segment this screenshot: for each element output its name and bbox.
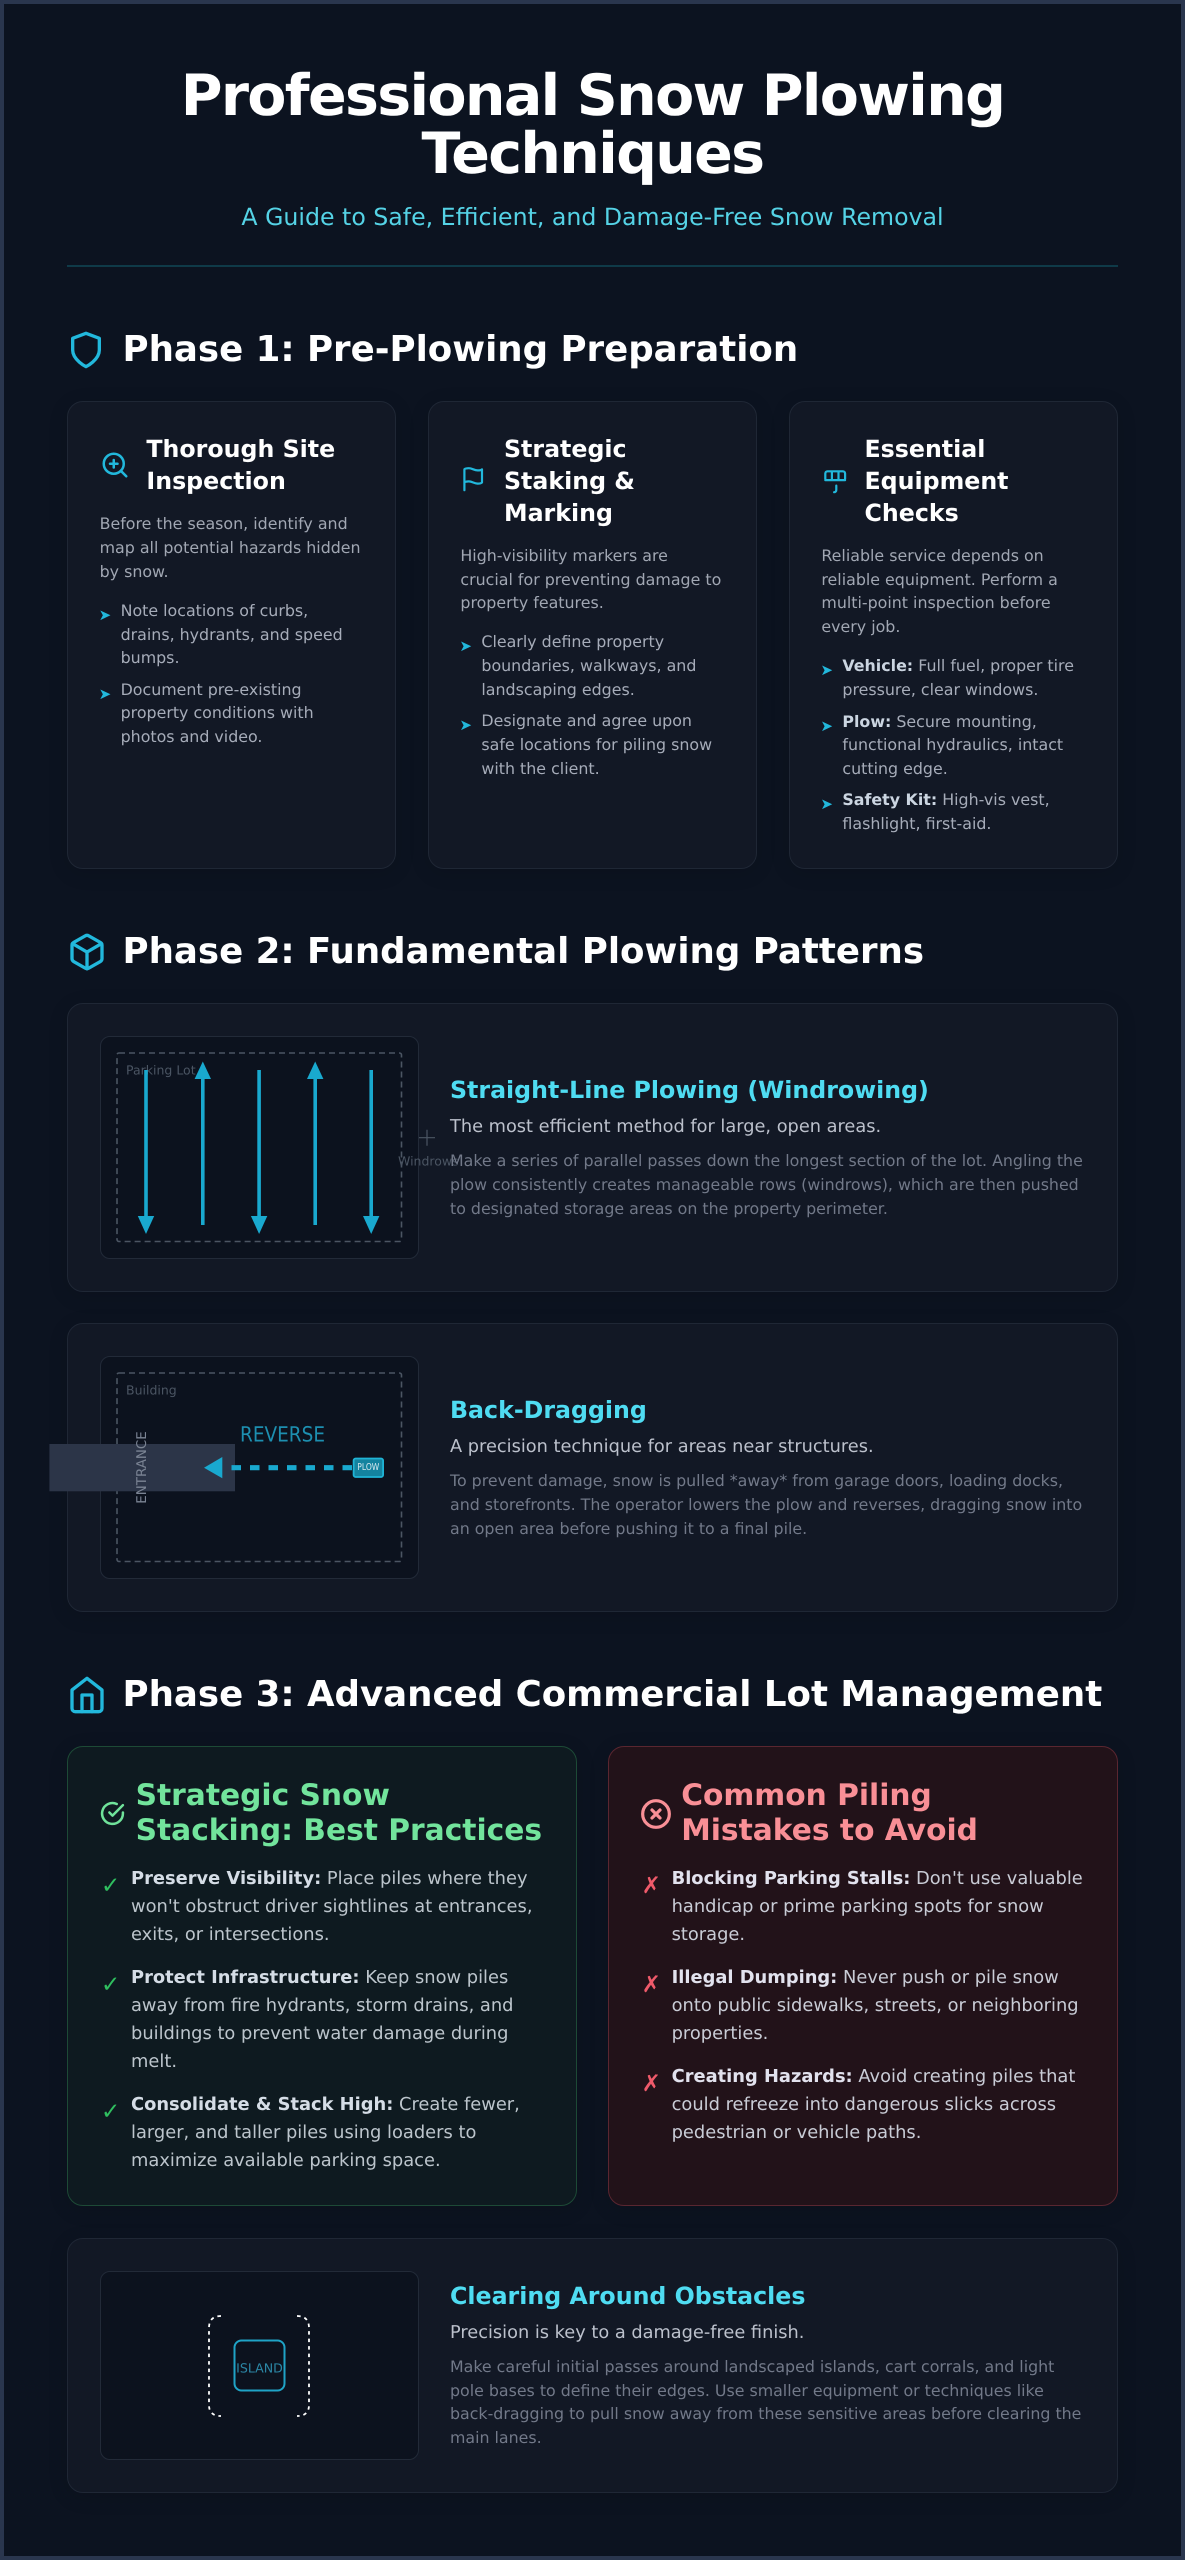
card intro: multi-point inspection before (821, 593, 1051, 612)
technique detail: Make careful initial passes around landscaped islands, cart corrals, and light (450, 2357, 1054, 2376)
entrance label: ENTRANCE (135, 1431, 150, 1504)
card heading: Staking & (504, 467, 635, 495)
arrow: pass 3 down (251, 1070, 267, 1234)
card intro: map all potential hazards hidden (100, 538, 361, 557)
card intro (821, 546, 1058, 636)
card intro: every job. (821, 617, 900, 636)
card heading: Essential (864, 435, 985, 463)
panel: thorough site inspection (67, 401, 396, 869)
panel heading (681, 1778, 978, 1848)
mistake: hazards: could refreeze into dangerous slicks across (672, 2094, 1056, 2115)
icon: box (70, 934, 104, 970)
card heading (864, 435, 1009, 527)
card intro: reliable equipment. Perform a (821, 570, 1058, 589)
panel: straight-line plowing (67, 1003, 1118, 1292)
practice: visibility (101, 1868, 533, 1944)
technique summary: Precision is key to a damage-free finish. (450, 2323, 804, 2343)
icon: shield (71, 332, 101, 368)
title: Techniques (422, 120, 763, 186)
panel: thorough site inspection: ➤ (99, 685, 111, 703)
plow block: PLOW (357, 1462, 380, 1473)
arrow: reverse path (204, 1457, 353, 1478)
panel: thorough site inspection: ➤ (99, 606, 111, 624)
diagram: windrowing (100, 1036, 419, 1259)
practice: infrastructure: Protect Infrastructure: Keep snow piles (131, 1967, 508, 1988)
windrows label: Windrows (398, 1154, 459, 1168)
card heading: Thorough Site (146, 435, 335, 463)
bullet: safety kit: Safety Kit: High-vis vest, (842, 790, 1050, 809)
mistake: dumping: Illegal Dumping: Never push or pile snow (672, 1967, 1059, 1988)
dashed plow path (209, 2316, 309, 2416)
bullet: vehicle (820, 656, 1074, 699)
bullet: vehicle: pressure, clear windows. (842, 680, 1038, 699)
bullet: document (99, 680, 314, 746)
bullet: vehicle: Vehicle: Full fuel, proper tire (842, 656, 1074, 675)
card heading (504, 435, 635, 527)
panel: best practices (67, 1746, 577, 2206)
arrow: pass 4 up (307, 1062, 323, 1225)
panel: mistakes to avoid: ✗ (642, 1972, 661, 1998)
mistake: dumping: properties. (672, 2023, 768, 2044)
diagram: windrowing: Parking Lot (126, 1062, 196, 1078)
technique detail: and storefronts. The operator lowers the plow and reverses, dragging snow into (450, 1495, 1082, 1514)
practice: consolidate: maximize available parking space. (131, 2150, 441, 2170)
mistake: stalls: Blocking Parking Stalls: Don't use valuable (672, 1868, 1083, 1889)
heading: phase 2: Phase 2: Fundamental Plowing Patterns (122, 931, 924, 972)
mistake: dumping: onto public sidewalks, streets, or neighboring (672, 1995, 1079, 2016)
mistake: hazards (642, 2066, 1075, 2142)
panel: mistakes to avoid: ✗ (642, 2071, 661, 2097)
icon: home (70, 1676, 104, 1714)
arrow: pass 5 down (363, 1070, 379, 1234)
panel heading: Common Piling (681, 1778, 932, 1813)
panel: strategic staking (428, 401, 757, 869)
panel: mistakes to avoid (608, 1746, 1118, 2206)
panel heading (136, 1778, 542, 1848)
panel heading: Mistakes to Avoid (681, 1813, 978, 1848)
mistake: dumping (642, 1967, 1079, 2044)
practice: consolidate: Consolidate & Stack High: Create fewer, (131, 2094, 520, 2115)
island (234, 2340, 284, 2390)
bullet: piling locations (459, 711, 712, 778)
icon: check circle (100, 1802, 124, 1826)
card heading: Inspection (146, 467, 286, 495)
technique heading: Back-Dragging (450, 1396, 647, 1424)
island: ISLAND (236, 2360, 283, 2376)
panel: clearing around obstacles (67, 2238, 1118, 2493)
reverse label: REVERSE (240, 1422, 325, 1446)
practice: visibility: exits, or intersections. (131, 1924, 330, 1944)
card intro: by snow. (100, 562, 169, 581)
panel: back-dragging (67, 1323, 1118, 1612)
windrows label (398, 1130, 459, 1168)
icon: flag (463, 467, 484, 492)
panel: equipment checks: ➤ (820, 717, 833, 735)
panel: equipment checks (789, 401, 1118, 869)
bullet: safety kit (820, 790, 1050, 833)
card heading: Equipment (864, 467, 1009, 495)
diagram: island clearing (100, 2271, 419, 2460)
bullet: locations: Note locations of curbs, (121, 601, 308, 620)
entrance band (49, 1444, 235, 1491)
bullet: boundaries: boundaries, walkways, and (481, 656, 696, 675)
panel: best practices: ✓ (101, 1873, 120, 1899)
icon: magnifier (102, 452, 128, 478)
technique detail (450, 2357, 1081, 2447)
technique detail: To prevent damage, snow is pulled *away* from garage doors, loading docks, (450, 1471, 1063, 1490)
arrow: pass 1 down (138, 1070, 154, 1234)
bullet: document: Document pre-existing (121, 680, 302, 699)
panel: strategic staking: ➤ (459, 637, 472, 655)
bullet: locations: bumps. (121, 648, 179, 667)
panel: best practices: ✓ (101, 1972, 120, 1998)
practice: infrastructure (101, 1967, 514, 2072)
mistake: hazards: pedestrian or vehicle paths. (672, 2122, 921, 2142)
panel: equipment checks: ➤ (820, 795, 833, 813)
technique heading: Clearing Around Obstacles (450, 2282, 805, 2310)
practice: consolidate: larger, and taller piles using loaders to (131, 2122, 476, 2143)
mistake: stalls (642, 1868, 1083, 1944)
bullet: boundaries: Clearly define property (481, 632, 664, 651)
diagram: back-dragging: Building (126, 1382, 177, 1398)
technique detail: main lanes. (450, 2428, 542, 2447)
bullet: boundaries (459, 632, 696, 699)
mistake: stalls: storage. (672, 1924, 745, 1944)
practice: consolidate (101, 2094, 520, 2170)
card heading: Marking (504, 499, 613, 527)
panel: strategic staking: ➤ (459, 716, 472, 734)
card intro: Reliable service depends on (821, 546, 1044, 565)
bullet: document: photos and video. (121, 727, 262, 746)
card heading: Strategic (504, 435, 627, 463)
technique detail: Make a series of parallel passes down the longest section of the lot. Angling the (450, 1151, 1083, 1170)
practice: infrastructure: away from fire hydrants, storm drains, and (131, 1995, 514, 2016)
bullet: locations: drains, hydrants, and speed (121, 625, 343, 644)
mistake: hazards: Creating Hazards: Avoid creating piles that (672, 2066, 1075, 2087)
bullet: plow: functional hydraulics, intact (842, 735, 1063, 754)
header divider (67, 265, 1118, 267)
card intro (460, 546, 721, 612)
bullet: plow: Plow: Secure mounting, (842, 712, 1037, 731)
practice: visibility: Preserve Visibility: Place piles where they (131, 1868, 528, 1889)
panel: best practices: ✓ (101, 2099, 120, 2125)
card heading: Checks (864, 499, 959, 527)
subtitle: A Guide to Safe, Efficient, and Damage-Free Snow Removal (241, 203, 944, 231)
mistake: stalls: handicap or prime parking spots for snow (672, 1896, 1044, 1917)
title: Professional Snow Plowing (181, 63, 1004, 129)
bullet: plow (820, 712, 1063, 778)
heading: phase 1: Phase 1: Pre-Plowing Preparation (122, 328, 798, 370)
technique detail (450, 1471, 1082, 1538)
technique detail: plow consistently creates manageable rows (windrows), which are then pushed (450, 1175, 1079, 1194)
technique heading: Straight-Line Plowing (Windrowing) (450, 1076, 929, 1104)
bullet: piling locations: Designate and agree upon (481, 711, 692, 730)
technique detail: back-dragging to pull snow away from these sensitive areas before clearing the (450, 2404, 1081, 2423)
bullet: piling locations: with the client. (481, 759, 600, 778)
card heading (146, 435, 335, 495)
icon: plow blade (824, 470, 846, 494)
arrow: pass 2 up (195, 1062, 211, 1225)
bullet: boundaries: landscaping edges. (481, 680, 635, 699)
bullet: document: property conditions with (121, 703, 314, 722)
practice: infrastructure: buildings to prevent water damage during (131, 2023, 508, 2044)
bullet: plow: cutting edge. (842, 759, 948, 778)
card intro: property features. (460, 593, 604, 612)
panel heading: Strategic Snow (136, 1778, 390, 1813)
technique detail: to designated storage areas on the property perimeter. (450, 1199, 888, 1218)
practice: visibility: won't obstruct driver sightlines at entrances, (131, 1896, 533, 1917)
technique detail: pole bases to define their edges. Use smaller equipment or techniques like (450, 2381, 1044, 2400)
bullet: piling locations: safe locations for piling snow (481, 735, 712, 754)
panel: equipment checks: ➤ (820, 661, 833, 679)
heading: phase 3: Phase 3: Advanced Commercial Lot Management (122, 1674, 1102, 1714)
bullet: locations (99, 601, 343, 667)
bullet: safety kit: flashlight, first-aid. (842, 814, 991, 833)
technique summary: A precision technique for areas near structures. (450, 1437, 874, 1457)
plow block (354, 1458, 383, 1477)
practice: infrastructure: melt. (131, 2051, 177, 2072)
card intro: crucial for preventing damage to (460, 570, 721, 589)
title (181, 63, 1004, 186)
technique detail: an open area before pushing it to a final pile. (450, 1519, 807, 1538)
diagram: back-dragging (100, 1356, 419, 1579)
panel heading: Stacking: Best Practices (136, 1813, 542, 1848)
technique detail (450, 1151, 1083, 1218)
card intro: High-visibility markers are (460, 546, 668, 565)
panel: mistakes to avoid: ✗ (642, 1873, 661, 1899)
card intro (100, 514, 361, 581)
icon: x circle (641, 1799, 671, 1829)
card intro: Before the season, identify and (100, 514, 348, 533)
technique summary: The most efficient method for large, open areas. (450, 1117, 881, 1137)
